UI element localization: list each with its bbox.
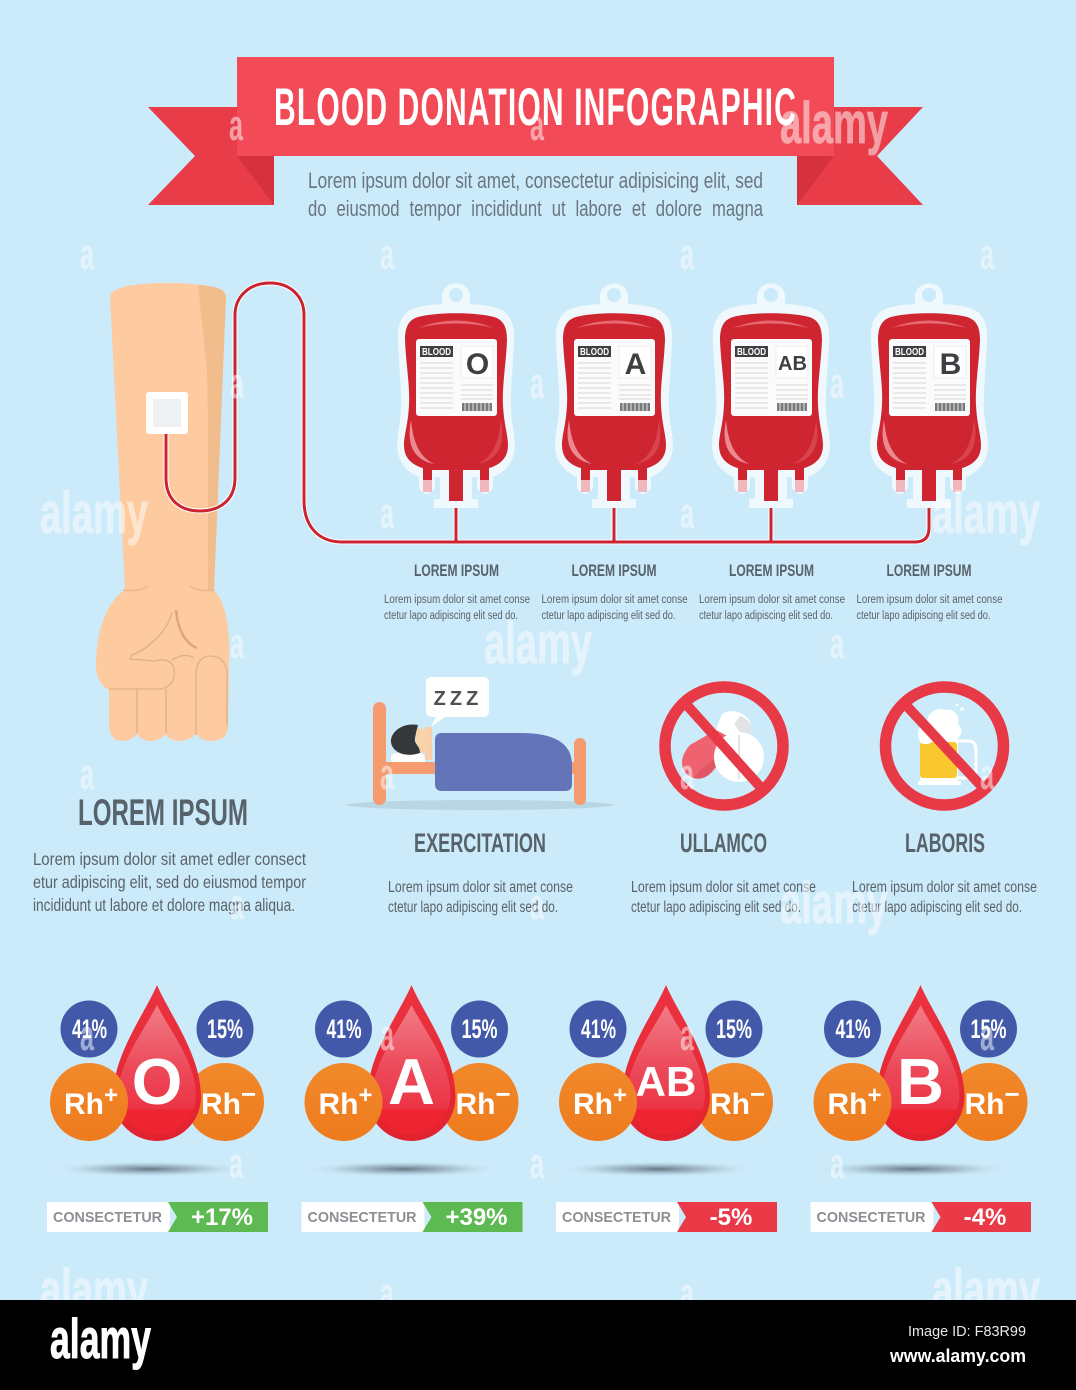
watermarks: a <box>980 750 994 799</box>
stat tag B: CONSECTETUR <box>816 1209 926 1226</box>
blood drop B: B <box>897 1045 944 1118</box>
Rh+ circle B: + <box>868 1082 882 1109</box>
blood drop AB: AB <box>636 1058 696 1105</box>
watermarks: a <box>380 750 394 799</box>
bag caption A: ctetur lapo adipiscing elit sed do. <box>542 610 676 622</box>
blood bag A: BLOOD <box>580 347 609 358</box>
blood type B <box>810 985 1031 1232</box>
watermarks: a <box>980 230 994 279</box>
percent bubble Rh- O <box>196 1000 254 1058</box>
percent bubble Rh- AB <box>706 1000 762 1058</box>
heading: exercitation: EXERCITATION <box>414 828 546 858</box>
text block: left paragraph: Lorem ipsum dolor sit amet edler consect <box>33 849 306 869</box>
blood type A <box>302 985 522 1232</box>
bag caption AB: Lorem ipsum dolor sit amet conse <box>699 594 845 606</box>
blood bag B: B <box>940 348 961 381</box>
bag caption B: LOREM IPSUM <box>886 561 972 580</box>
watermarks: alamy <box>484 611 592 676</box>
percent bubble Rh+ AB: 41% <box>581 1014 616 1044</box>
percent bubble Rh- AB: 15% <box>716 1014 752 1044</box>
Rh+ circle A <box>304 1063 382 1141</box>
stat tag O <box>47 1202 268 1232</box>
Rh- circle A <box>440 1063 518 1141</box>
percent bubble Rh- B <box>960 1000 1017 1058</box>
bag caption B: Lorem ipsum dolor sit amet conse <box>856 594 1002 606</box>
blood drop AB <box>622 985 710 1141</box>
blood drop A: A <box>388 1045 435 1118</box>
percent bubble Rh+ B: 41% <box>836 1014 870 1044</box>
blood drop O <box>113 985 201 1141</box>
text block: exercitation: ctetur lapo adipiscing elit sed do. <box>388 899 558 916</box>
text block: left paragraph: etur adipiscing elit, sed do eiusmod tempor <box>33 872 306 892</box>
watermarks: a <box>80 230 94 279</box>
percent bubble Rh+ O <box>60 1000 118 1058</box>
Rh+ circle A: Rh <box>318 1088 358 1121</box>
watermarks: a <box>230 880 244 929</box>
watermarks: a <box>380 1011 394 1060</box>
watermarks: a <box>830 619 844 668</box>
shadow AB <box>560 1161 756 1177</box>
arm and fist <box>96 283 229 741</box>
watermarks: a <box>229 1139 243 1188</box>
watermarks: a <box>830 1139 844 1188</box>
Rh- circle AB <box>695 1063 773 1141</box>
stat tag O: CONSECTETUR <box>53 1209 162 1226</box>
text block: left paragraph <box>33 849 306 915</box>
percent bubble Rh- B: 15% <box>970 1014 1006 1044</box>
text block: exercitation <box>388 879 573 916</box>
percent bubble Rh+ A <box>315 1000 372 1058</box>
percent bubble Rh- O: 15% <box>207 1014 243 1044</box>
heading: lorem ipsum: LOREM IPSUM <box>78 792 248 833</box>
footer bar: alamy <box>50 1307 151 1370</box>
watermarks: a <box>680 489 694 538</box>
watermarks: a <box>380 489 394 538</box>
Rh+ circle AB: + <box>613 1082 627 1109</box>
watermarks: a <box>680 230 694 279</box>
ribbon banner <box>148 57 923 205</box>
intro text: do eiusmod tempor incididunt ut labore et dolore magna <box>308 196 764 221</box>
bag caption A: Lorem ipsum dolor sit amet conse <box>542 594 688 606</box>
watermarks: a <box>530 359 544 408</box>
Rh- label O: Rh <box>201 1088 241 1121</box>
percent bubble Rh- A <box>451 1000 508 1058</box>
speech bubble zzz <box>426 677 489 727</box>
Rh- label A: Rh <box>456 1088 496 1121</box>
stat tag AB <box>556 1202 777 1232</box>
icon: sleeping person in bed <box>347 702 613 810</box>
bag caption AB <box>699 561 845 622</box>
Rh- circle B <box>950 1063 1028 1141</box>
Rh+ circle A: + <box>358 1082 373 1109</box>
Rh+ circle AB <box>559 1063 637 1141</box>
heading: ullamco: ULLAMCO <box>680 828 767 858</box>
Rh- label B: Rh <box>964 1088 1004 1121</box>
Rh- label O: − <box>241 1079 256 1109</box>
Rh+ circle O: Rh <box>64 1088 104 1121</box>
stat tag AB: -5% <box>710 1204 752 1231</box>
blood bag AB: AB <box>778 353 807 375</box>
text block: laboris <box>852 879 1037 916</box>
Rh- circle O <box>186 1063 264 1141</box>
blood bag O: BLOOD <box>422 347 451 358</box>
intro text: Lorem ipsum dolor sit amet, consectetur adipisicing elit, sed <box>308 168 763 193</box>
watermarks: alamy <box>40 1258 148 1323</box>
icon: no pills <box>665 687 783 805</box>
text block: exercitation: Lorem ipsum dolor sit amet conse <box>388 879 573 896</box>
blood drop B <box>876 985 964 1141</box>
percent bubble Rh+ O: 41% <box>72 1014 107 1044</box>
bag caption O: ctetur lapo adipiscing elit sed do. <box>384 610 518 622</box>
percent bubble Rh+ AB <box>570 1000 626 1058</box>
IV tube <box>166 283 929 542</box>
blood type AB <box>556 985 777 1232</box>
intro text <box>308 168 764 221</box>
text block: laboris: ctetur lapo adipiscing elit sed do. <box>852 899 1022 916</box>
percent bubble Rh+ B <box>824 1000 881 1058</box>
watermarks: a <box>680 750 694 799</box>
blood bag A: A <box>625 348 646 381</box>
watermarks: a <box>80 1011 94 1060</box>
stat tag B: -4% <box>964 1204 1006 1231</box>
stat tag AB: CONSECTETUR <box>562 1209 671 1226</box>
watermarks: a <box>230 359 244 408</box>
watermarks: a <box>530 1139 544 1188</box>
blood bag B: BLOOD <box>895 347 924 358</box>
footer bar <box>0 1300 1076 1390</box>
blood bag O: O <box>466 348 489 381</box>
bag caption AB: LOREM IPSUM <box>729 561 814 580</box>
watermarks: a <box>229 101 243 150</box>
watermarks: a <box>80 750 94 799</box>
blood bag O <box>397 284 515 508</box>
heading: laboris: LABORIS <box>905 828 985 858</box>
text block: ullamco: Lorem ipsum dolor sit amet conse <box>631 879 816 896</box>
bag caption B <box>856 561 1002 622</box>
Rh+ circle B: Rh <box>828 1088 868 1121</box>
watermarks: a <box>980 1011 994 1060</box>
stat tag A: CONSECTETUR <box>308 1209 417 1226</box>
blood drop A <box>368 985 456 1141</box>
text block: ullamco: ctetur lapo adipiscing elit sed do. <box>631 899 801 916</box>
bag caption A: LOREM IPSUM <box>572 561 656 580</box>
Rh+ circle O: + <box>104 1082 118 1109</box>
percent bubble Rh- A: 15% <box>462 1014 498 1044</box>
bag caption AB: ctetur lapo adipiscing elit sed do. <box>699 610 833 622</box>
Rh+ circle B <box>814 1063 892 1141</box>
stat tag B <box>810 1202 1031 1232</box>
bag caption O: LOREM IPSUM <box>414 561 499 580</box>
Rh- label B: − <box>1004 1079 1020 1109</box>
bag caption B: ctetur lapo adipiscing elit sed do. <box>856 610 990 622</box>
Rh- label AB: − <box>750 1079 765 1109</box>
icon: no alcohol <box>886 687 1004 805</box>
watermarks: a <box>680 1269 694 1318</box>
blood type O <box>47 985 268 1232</box>
watermarks: a <box>530 880 544 929</box>
IV patch <box>146 392 188 434</box>
blood bag A <box>555 284 673 508</box>
stat tag A <box>302 1202 522 1232</box>
watermarks: alamy <box>780 91 888 156</box>
footer bar: Image ID: F83R99 <box>908 1323 1026 1340</box>
watermarks: a <box>680 1011 694 1060</box>
text block: ullamco <box>631 879 816 916</box>
blood bag B <box>870 284 988 508</box>
blood bag AB: BLOOD <box>737 347 766 358</box>
watermarks: alamy <box>40 481 148 546</box>
Rh+ circle AB: Rh <box>573 1088 613 1121</box>
footer bar: www.alamy.com <box>889 1346 1026 1366</box>
watermarks: a <box>530 101 544 150</box>
speech bubble zzz: ZZZ <box>434 688 482 710</box>
watermarks: a <box>830 359 844 408</box>
watermarks: alamy <box>780 871 888 936</box>
stat tag O: +17% <box>191 1204 253 1231</box>
Rh- label AB: Rh <box>710 1088 750 1121</box>
shadow B <box>814 1161 1010 1177</box>
bag caption A <box>542 561 688 622</box>
watermarks: a <box>230 619 244 668</box>
watermarks: a <box>380 1269 394 1318</box>
text block: left paragraph: incididunt ut labore et dolore magna aliqua. <box>33 895 295 915</box>
shadow O <box>51 1161 247 1177</box>
Rh- label A: − <box>496 1079 511 1109</box>
bag caption O <box>384 561 530 622</box>
bag caption O: Lorem ipsum dolor sit amet conse <box>384 594 530 606</box>
stat tag A: +39% <box>445 1204 508 1231</box>
blood drop O: O <box>132 1045 182 1118</box>
Rh+ circle O <box>50 1063 128 1141</box>
percent bubble Rh+ A: 41% <box>326 1014 362 1044</box>
shadow A <box>306 1161 502 1177</box>
watermarks: a <box>380 230 394 279</box>
blood bag AB <box>712 284 830 508</box>
